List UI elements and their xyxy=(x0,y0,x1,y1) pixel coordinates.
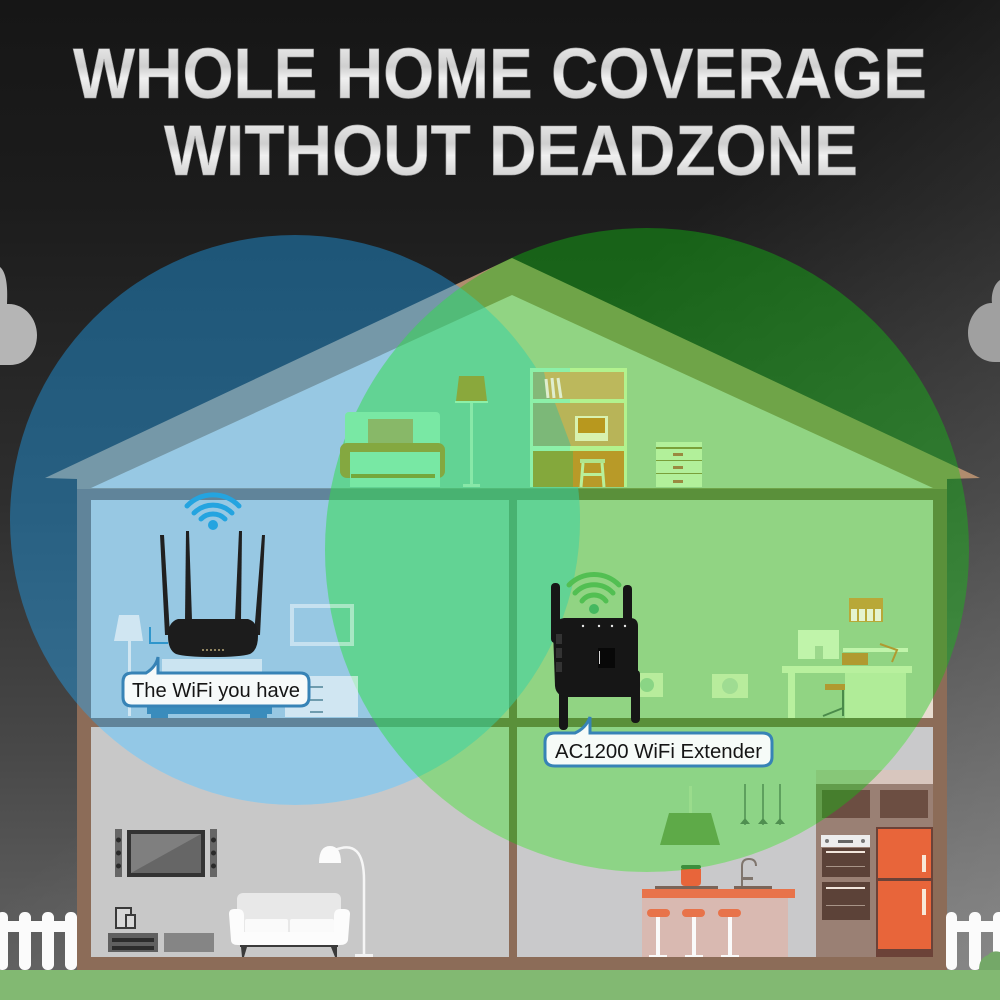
icon: right cloud xyxy=(968,280,1000,362)
living room arc lamp xyxy=(319,846,373,957)
right white picket fence xyxy=(946,912,1000,970)
pot lid xyxy=(681,865,701,869)
office desk xyxy=(782,598,912,718)
living room photo frames and console xyxy=(108,908,214,952)
lower left room tint overlap xyxy=(419,727,509,841)
lower left room xyxy=(91,727,509,957)
callout: The WiFi you have xyxy=(123,657,309,706)
icon: green wifi signal xyxy=(569,574,619,614)
upper left room xyxy=(91,500,509,718)
grass xyxy=(0,970,1000,1000)
WiFi extender xyxy=(551,583,640,730)
callout: AC1200 WiFi Extender: AC1200 WiFi Extender xyxy=(555,741,762,763)
bush xyxy=(979,951,1000,970)
attic furniture: floor lamp xyxy=(455,376,488,487)
router cable xyxy=(150,627,168,643)
room furniture: sofa cushion and table xyxy=(147,659,272,718)
kitchen pendant lamps xyxy=(660,784,785,845)
title: WITHOUT DEADZONE xyxy=(164,112,858,191)
kitchen cabinets xyxy=(816,770,933,957)
attic furniture: drawers xyxy=(656,442,702,487)
attic furniture: armchair xyxy=(340,412,445,487)
roof xyxy=(45,258,980,489)
overlap highlight xyxy=(325,288,580,776)
blue wifi coverage circle xyxy=(10,235,580,805)
house structure xyxy=(45,258,980,970)
green wifi coverage circle xyxy=(325,228,969,872)
kitchen fridge xyxy=(876,827,933,957)
icon: left cloud xyxy=(0,267,37,365)
upper right room xyxy=(517,500,933,718)
router with four antennas xyxy=(160,531,265,657)
attic room xyxy=(91,295,933,488)
title xyxy=(73,35,927,191)
icon: blue wifi signal xyxy=(187,495,239,530)
wall sockets xyxy=(639,673,748,698)
living room TV and speakers xyxy=(115,829,217,877)
outer walls xyxy=(77,488,947,970)
callout: AC1200 WiFi Extender xyxy=(545,717,772,766)
kitchen counter with pot and sink xyxy=(642,859,795,957)
kitchen stools xyxy=(647,909,741,957)
room furniture: low drawers xyxy=(285,676,358,717)
lower right room xyxy=(517,727,933,957)
living room sofa xyxy=(229,893,350,957)
bookcase xyxy=(530,368,627,487)
lower left room tint in coverage xyxy=(100,727,418,805)
title: WHOLE HOME COVERAGE xyxy=(73,35,927,114)
left white picket fence xyxy=(0,912,77,970)
room furniture: wall picture xyxy=(290,604,354,646)
callout: The WiFi you have: The WiFi you have xyxy=(132,680,300,702)
room furniture: table lamp xyxy=(114,615,143,716)
kitchen ovens xyxy=(821,835,870,920)
lower right room tint in coverage xyxy=(517,727,916,872)
